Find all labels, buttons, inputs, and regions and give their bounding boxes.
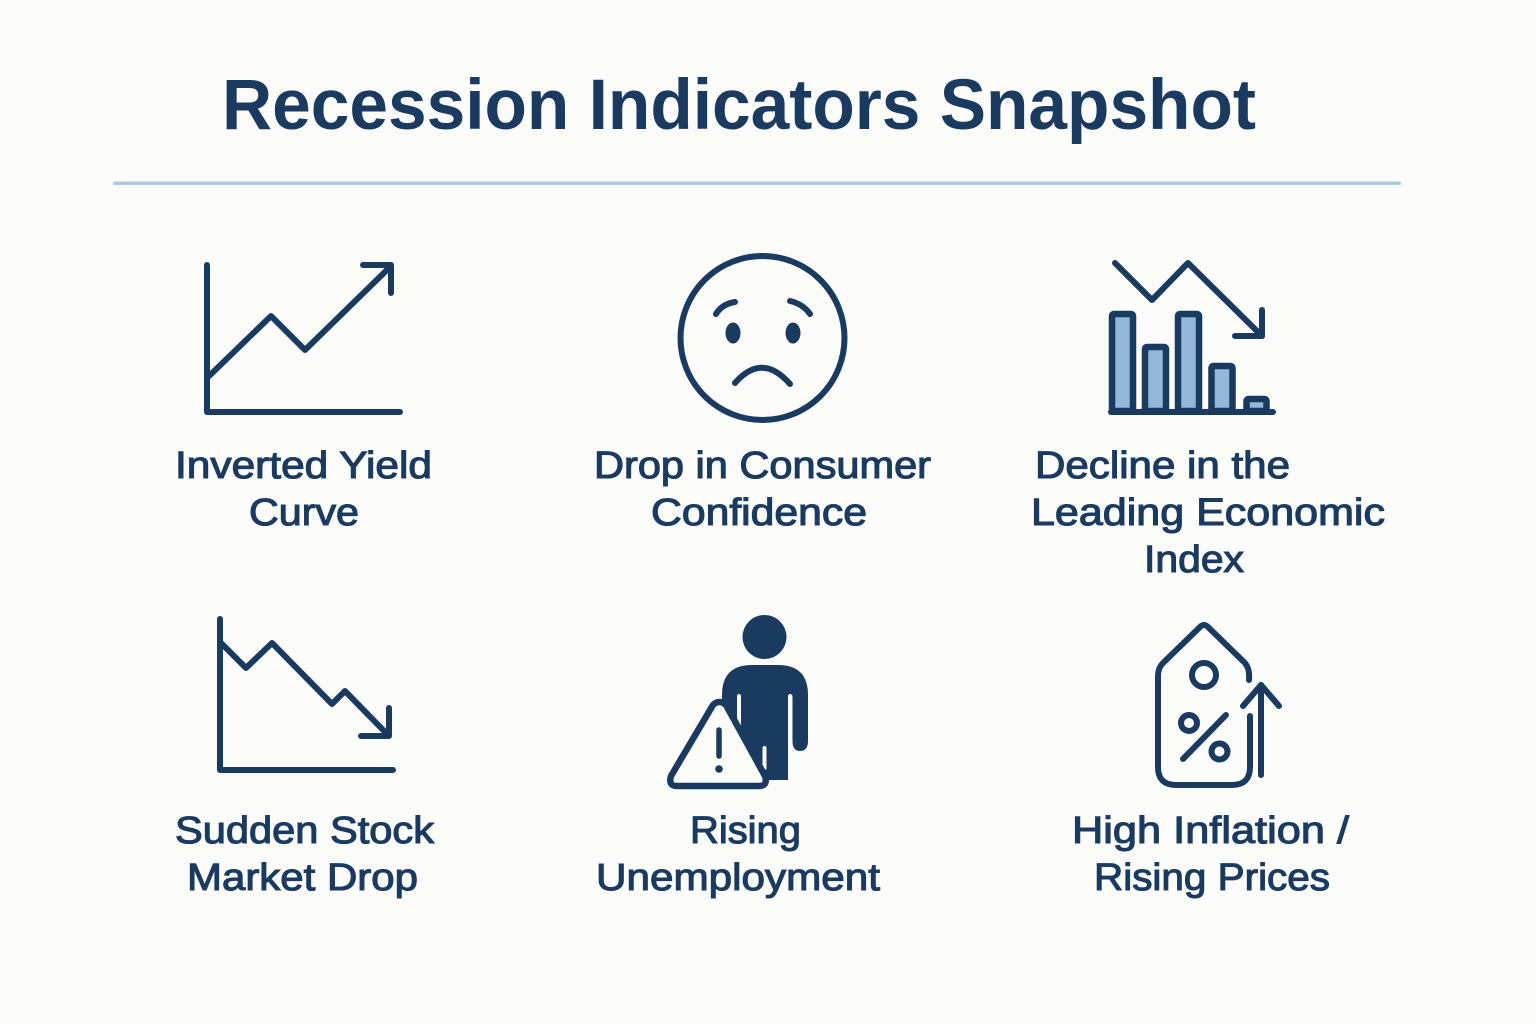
panel: rising unemployment (596, 615, 880, 899)
panel: high inflation (1072, 625, 1350, 899)
panel: inverted yield curve (175, 265, 432, 534)
title: Recession Indicators Snapshot (222, 66, 1256, 145)
icon: declining bars and arrow (1111, 263, 1273, 412)
label: consumer confidence: Confidence (651, 492, 867, 534)
label: consumer confidence: Drop in Consumer (594, 445, 931, 487)
label: leading economic index: Index (1144, 539, 1244, 581)
label: inverted yield curve: Inverted Yield (175, 445, 432, 487)
label: high inflation: Rising Prices (1094, 857, 1330, 899)
icon: person with warning triangle (670, 615, 808, 786)
label: leading economic index: Decline in the (1035, 445, 1290, 487)
panel: leading economic index (1031, 263, 1385, 581)
panel: stock market drop (175, 619, 435, 899)
panel: consumer confidence (594, 256, 931, 534)
label: leading economic index (1031, 445, 1385, 581)
label: inverted yield curve: Curve (249, 492, 359, 534)
label: high inflation: High Inflation / (1072, 810, 1350, 852)
label: stock market drop: Sudden Stock (175, 810, 435, 852)
icon: price tag with up arrow (1158, 625, 1279, 785)
label: rising unemployment: Unemployment (596, 857, 880, 899)
label: rising unemployment: Rising (690, 810, 801, 852)
label: high inflation (1072, 810, 1350, 899)
label: stock market drop: Market Drop (187, 857, 418, 899)
icon: falling line chart (220, 619, 393, 770)
label: rising unemployment (596, 810, 880, 899)
label: inverted yield curve (175, 445, 432, 534)
icon: rising line chart (207, 265, 400, 412)
label: leading economic index: Leading Economic (1031, 492, 1385, 534)
label: stock market drop (175, 810, 435, 899)
icon: worried face (680, 256, 844, 420)
label: consumer confidence (594, 445, 931, 534)
